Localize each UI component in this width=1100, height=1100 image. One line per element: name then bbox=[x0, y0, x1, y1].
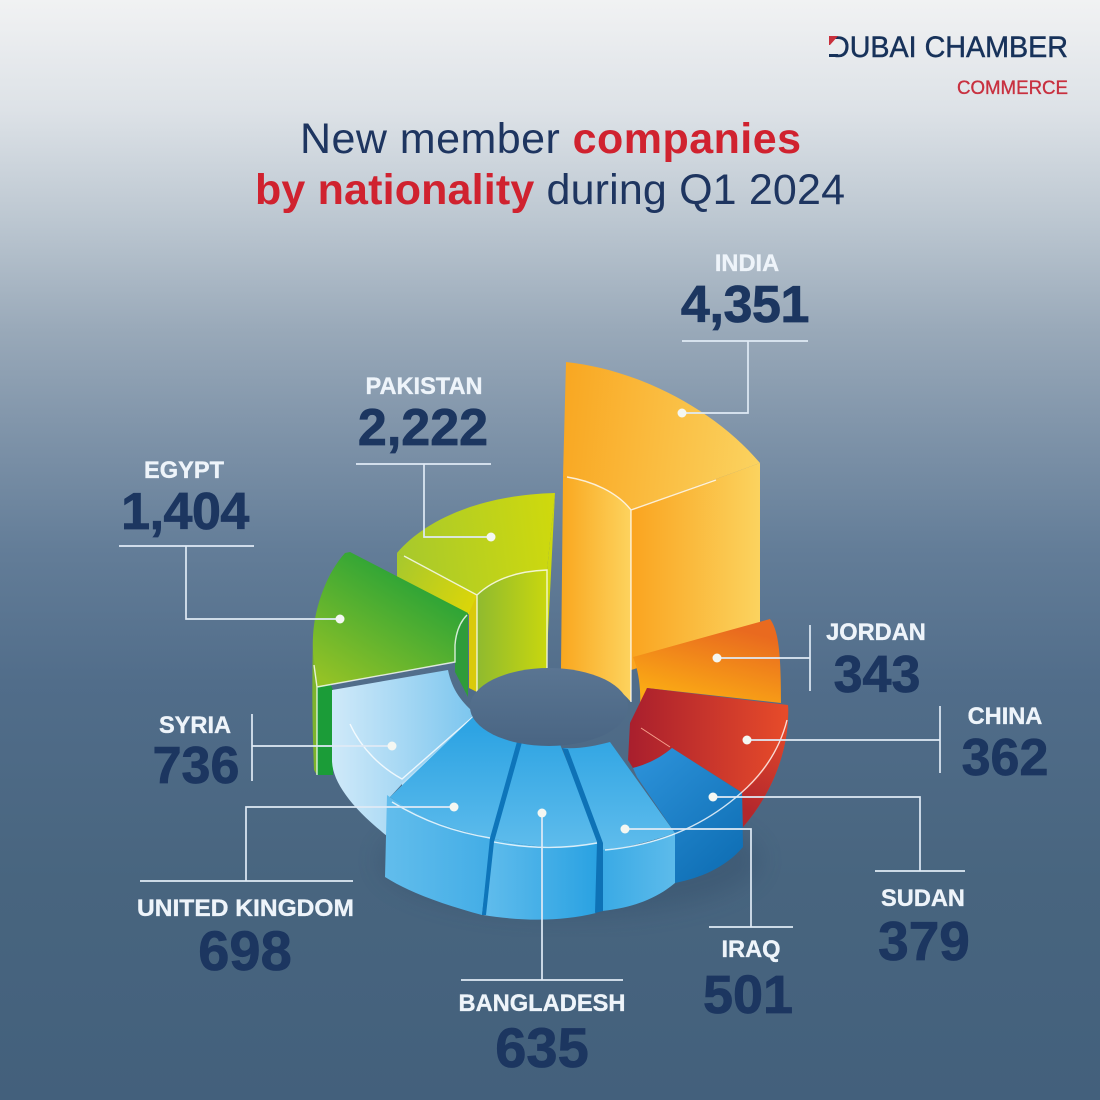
centre hole bbox=[470, 668, 628, 746]
slice: Bangladesh bbox=[482, 731, 600, 920]
title bbox=[255, 115, 845, 214]
callout: United Kingdom: 698 bbox=[198, 919, 292, 982]
callout: Bangladesh bbox=[458, 808, 626, 1079]
callout: Iraq bbox=[620, 824, 793, 1025]
callout: Iraq: IRAQ bbox=[722, 937, 780, 963]
callout: Bangladesh: 635 bbox=[495, 1016, 589, 1079]
callout: Pakistan: PAKISTAN bbox=[365, 374, 483, 400]
callout: United Kingdom: UNITED KINGDOM bbox=[137, 896, 354, 922]
callout: India: INDIA bbox=[715, 251, 779, 277]
logo: Dubai Chamber Commerce: DUBAI CHAMBER bbox=[829, 31, 1068, 64]
callout: India bbox=[678, 251, 809, 418]
slice: Iraq bbox=[562, 742, 675, 913]
slice: United Kingdom bbox=[385, 717, 520, 915]
slice: Egypt bbox=[312, 552, 468, 775]
logo: Dubai Chamber Commerce: COMMERCE bbox=[957, 77, 1068, 99]
callout: Syria: SYRIA bbox=[159, 713, 231, 739]
callout: China: 362 bbox=[962, 729, 1048, 787]
slice: Sudan bbox=[633, 748, 743, 883]
callout: Egypt: 1,404 bbox=[121, 483, 249, 541]
logo: Dubai Chamber Commerce bbox=[828, 31, 1068, 99]
callout: Bangladesh: BANGLADESH bbox=[458, 991, 626, 1017]
callout: India: 4,351 bbox=[681, 276, 809, 334]
slice: China bbox=[628, 688, 788, 827]
callout: Jordan: JORDAN bbox=[826, 620, 926, 646]
callout: Sudan bbox=[708, 792, 970, 972]
slice: Jordan bbox=[633, 619, 781, 707]
slice: Syria bbox=[332, 670, 477, 836]
callout: China bbox=[742, 704, 1048, 787]
callout: Pakistan bbox=[356, 374, 496, 542]
rim highlight bbox=[392, 720, 787, 850]
callout: Sudan: SUDAN bbox=[881, 886, 965, 912]
callout: China: CHINA bbox=[968, 704, 1042, 730]
callout: Iraq: 501 bbox=[703, 965, 793, 1025]
title: by nationality during Q1 2024 bbox=[255, 166, 845, 214]
callout: Jordan: 343 bbox=[834, 646, 920, 704]
callout: Sudan: 379 bbox=[878, 910, 970, 972]
slice: Pakistan bbox=[397, 493, 555, 692]
callout: Jordan bbox=[712, 620, 926, 704]
title: New member companies bbox=[300, 115, 801, 163]
callout: Egypt: EGYPT bbox=[144, 458, 225, 484]
callout: Syria: 736 bbox=[153, 737, 239, 795]
3D ring chart bbox=[312, 362, 788, 920]
callout: United Kingdom bbox=[137, 802, 458, 982]
callout: Pakistan: 2,222 bbox=[358, 399, 488, 457]
callout: Syria bbox=[153, 713, 396, 795]
slice: India bbox=[561, 362, 760, 702]
callout: Egypt bbox=[119, 458, 344, 624]
